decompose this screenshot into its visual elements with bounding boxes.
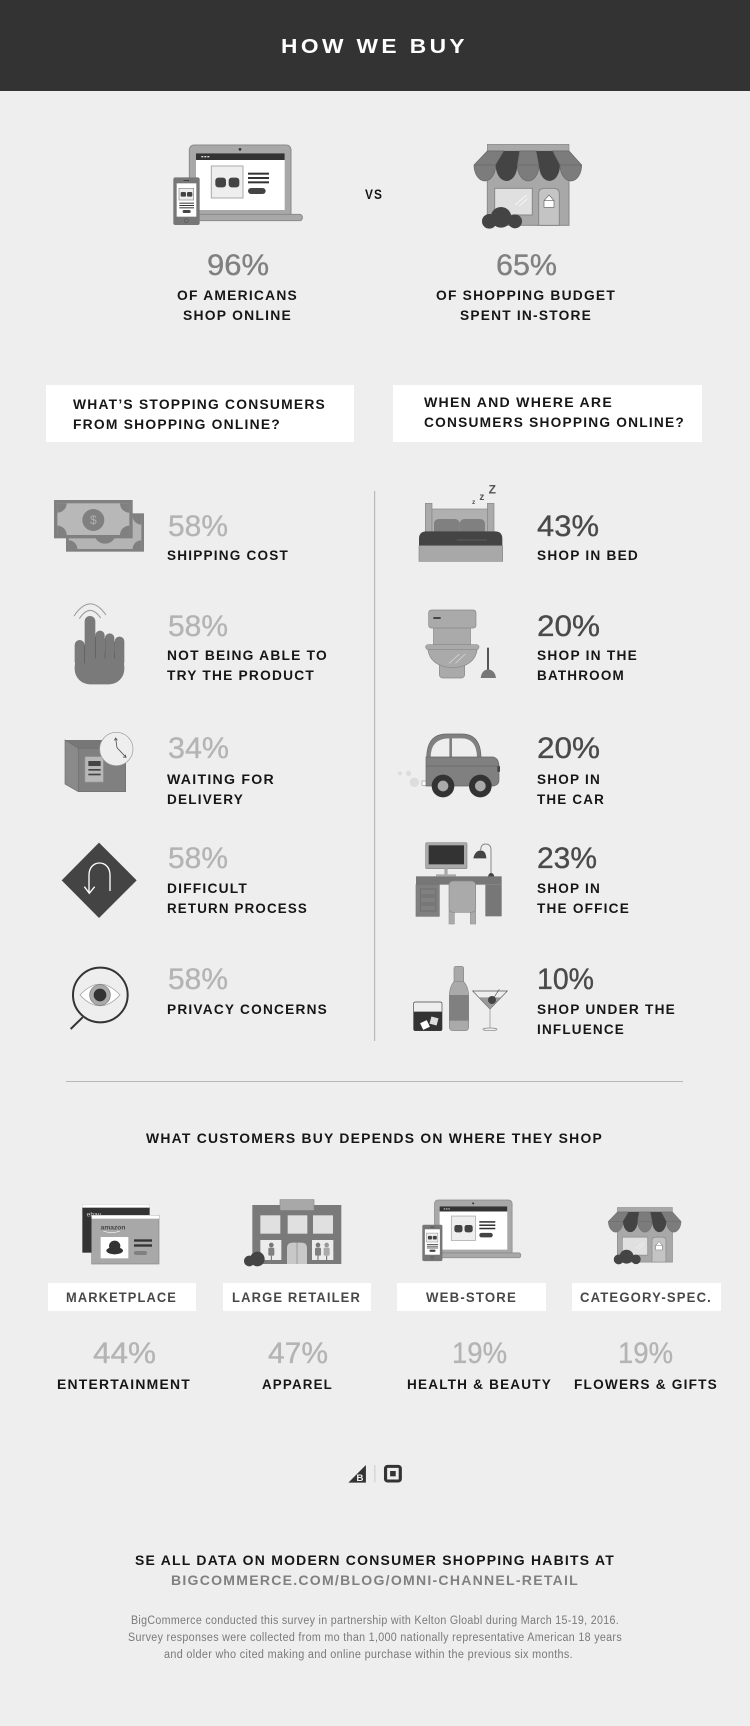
- heading: what's stopping consumers: FROM SHOPPING ONLINE?: [73, 417, 281, 432]
- stat: in-store budget: SPENT IN-STORE: [460, 308, 592, 323]
- stat: try the product: [167, 610, 328, 683]
- icon: bed: z: [479, 492, 484, 503]
- stat: shop in car: THE CAR: [537, 792, 605, 807]
- stat: under the influence: INFLUENCE: [537, 1022, 625, 1037]
- stat: shipping cost: [167, 510, 289, 563]
- icon: banknotes: [54, 500, 144, 552]
- call to action: [135, 1553, 615, 1588]
- column: category-specific: CATEGORY-SPEC.: [580, 1290, 712, 1305]
- icon: car: [398, 734, 500, 797]
- column: marketplace: ENTERTAINMENT: [57, 1377, 191, 1392]
- stat: online shoppers: OF AMERICANS: [177, 288, 298, 303]
- icon: bed: [419, 482, 503, 561]
- header banner: [0, 0, 750, 91]
- heading: when and where: CONSUMERS SHOPPING ONLINE?: [424, 415, 685, 430]
- stat: shop in office: THE OFFICE: [537, 901, 630, 916]
- stat: shipping cost: SHIPPING COST: [167, 548, 289, 563]
- stat: shop in bathroom: BATHROOM: [537, 668, 625, 683]
- stat: online shoppers: [177, 249, 298, 323]
- column: category-specific: FLOWERS & GIFTS: [574, 1377, 718, 1392]
- stat: difficult return: 58%: [168, 842, 228, 875]
- icon: pointing hand: [74, 604, 124, 684]
- stat: try the product: NOT BEING ABLE TO: [167, 648, 328, 663]
- column: large retailer: LARGE RETAILER: [232, 1290, 361, 1305]
- column: marketplace: 44%: [93, 1337, 156, 1370]
- stat: difficult return: RETURN PROCESS: [167, 901, 308, 916]
- column: category-specific: [572, 1283, 721, 1392]
- stat: shop in car: 20%: [537, 732, 600, 765]
- call to action: SE ALL DATA ON MODERN CONSUMER SHOPPING HABITS AT: [135, 1553, 615, 1568]
- stat: shop in bathroom: SHOP IN THE: [537, 648, 638, 663]
- stat: shop in bathroom: [537, 610, 638, 683]
- stat: in-store budget: 65%: [496, 249, 557, 282]
- stat: shop in bed: SHOP IN BED: [537, 548, 639, 563]
- logos: BigCommerce and Square: [348, 1465, 400, 1484]
- stat: waiting for delivery: DELIVERY: [167, 792, 244, 807]
- stat: under the influence: 10%: [537, 963, 594, 996]
- stat: under the influence: SHOP UNDER THE: [537, 1002, 676, 1017]
- icon: office desk: [416, 843, 502, 924]
- stat: shop in car: SHOP IN: [537, 772, 601, 787]
- icon: large retailer building: [244, 1200, 341, 1266]
- column: web-store: [397, 1283, 552, 1392]
- heading: what's stopping consumers: [46, 385, 354, 442]
- stat: difficult return: DIFFICULT: [167, 881, 248, 896]
- stat: try the product: TRY THE PRODUCT: [167, 668, 315, 683]
- column: large retailer: [223, 1283, 371, 1392]
- icon: bed: Z: [489, 482, 496, 496]
- stat: privacy concerns: PRIVACY CONCERNS: [167, 1002, 328, 1017]
- column: category-specific: 19%: [618, 1337, 673, 1370]
- stat: shop in office: 23%: [537, 842, 597, 875]
- icon: banknotes: $: [90, 513, 97, 527]
- stat: in-store budget: [436, 249, 616, 323]
- stat: shop in bed: 43%: [537, 510, 599, 543]
- footnote: [128, 1615, 622, 1661]
- call to action: BIGCOMMERCE.COM/BLOG/OMNI-CHANNEL-RETAIL: [171, 1573, 579, 1588]
- stat: in-store budget: OF SHOPPING BUDGET: [436, 288, 616, 303]
- icon: parcel with clock: [65, 732, 133, 792]
- column: marketplace: [48, 1283, 196, 1392]
- stat: difficult return: [167, 842, 308, 916]
- heading: what customers buy: WHAT CUSTOMERS BUY DEPENDS ON WHERE THEY SHOP: [146, 1131, 603, 1146]
- icon: laptop and phone: [173, 145, 302, 225]
- logos: BigCommerce and Square: B: [356, 1473, 364, 1484]
- icon: return arrow diamond: [62, 843, 137, 918]
- stat: online shoppers: SHOP ONLINE: [183, 308, 292, 323]
- stat: try the product: 58%: [168, 610, 228, 643]
- stat: privacy concerns: [167, 963, 328, 1017]
- stat: waiting for delivery: [167, 732, 275, 807]
- column: web-store: WEB-STORE: [426, 1290, 517, 1305]
- stat: under the influence: [537, 963, 676, 1037]
- footnote: and older who cited making and online purchase within the previous six months.: [164, 1649, 573, 1661]
- stat: shop in bathroom: 20%: [537, 610, 600, 643]
- icon: magnifier with eye: [71, 968, 128, 1029]
- icon: marketplace windows: ebay: [87, 1212, 102, 1219]
- column: web-store: HEALTH & BEAUTY: [407, 1377, 552, 1392]
- column: large retailer: APPAREL: [262, 1377, 333, 1392]
- footnote: BigCommerce conducted this survey in partnership with Kelton Gloabl during March 15-19, 2016.: [131, 1615, 619, 1627]
- stat: shop in office: SHOP IN: [537, 881, 601, 896]
- vs label: VS: [365, 187, 383, 202]
- column: large retailer: 47%: [268, 1337, 328, 1370]
- icon: toilet and plunger: [426, 610, 496, 678]
- stat: shipping cost: 58%: [168, 510, 228, 543]
- stat: waiting for delivery: 34%: [168, 732, 229, 765]
- icon: drinks: [414, 966, 507, 1031]
- stat: waiting for delivery: WAITING FOR: [167, 772, 275, 787]
- icon: category-specific store: [608, 1207, 681, 1264]
- column: web-store: 19%: [452, 1337, 507, 1370]
- icon: bed: z: [472, 499, 476, 506]
- icon: marketplace windows: [82, 1204, 159, 1264]
- footnote: Survey responses were collected from mo than 1,000 nationally representative American 18 years: [128, 1632, 622, 1644]
- stat: shop in office: [537, 842, 630, 916]
- icon: marketplace windows: amazon: [101, 1224, 125, 1231]
- icon: storefront: [474, 144, 582, 229]
- stat: shop in bed: [537, 510, 639, 563]
- column: marketplace: MARKETPLACE: [66, 1290, 177, 1305]
- heading: what's stopping consumers: WHAT’S STOPPING CONSUMERS: [73, 397, 326, 412]
- heading: when and where: WHEN AND WHERE ARE: [424, 395, 613, 410]
- heading: when and where: [393, 385, 702, 442]
- stat: online shoppers: 96%: [207, 249, 269, 282]
- stat: shop in car: [537, 732, 605, 807]
- header banner: HOW WE BUY: [281, 36, 468, 58]
- icon: web-store laptop: [422, 1200, 521, 1261]
- stat: privacy concerns: 58%: [168, 963, 228, 996]
